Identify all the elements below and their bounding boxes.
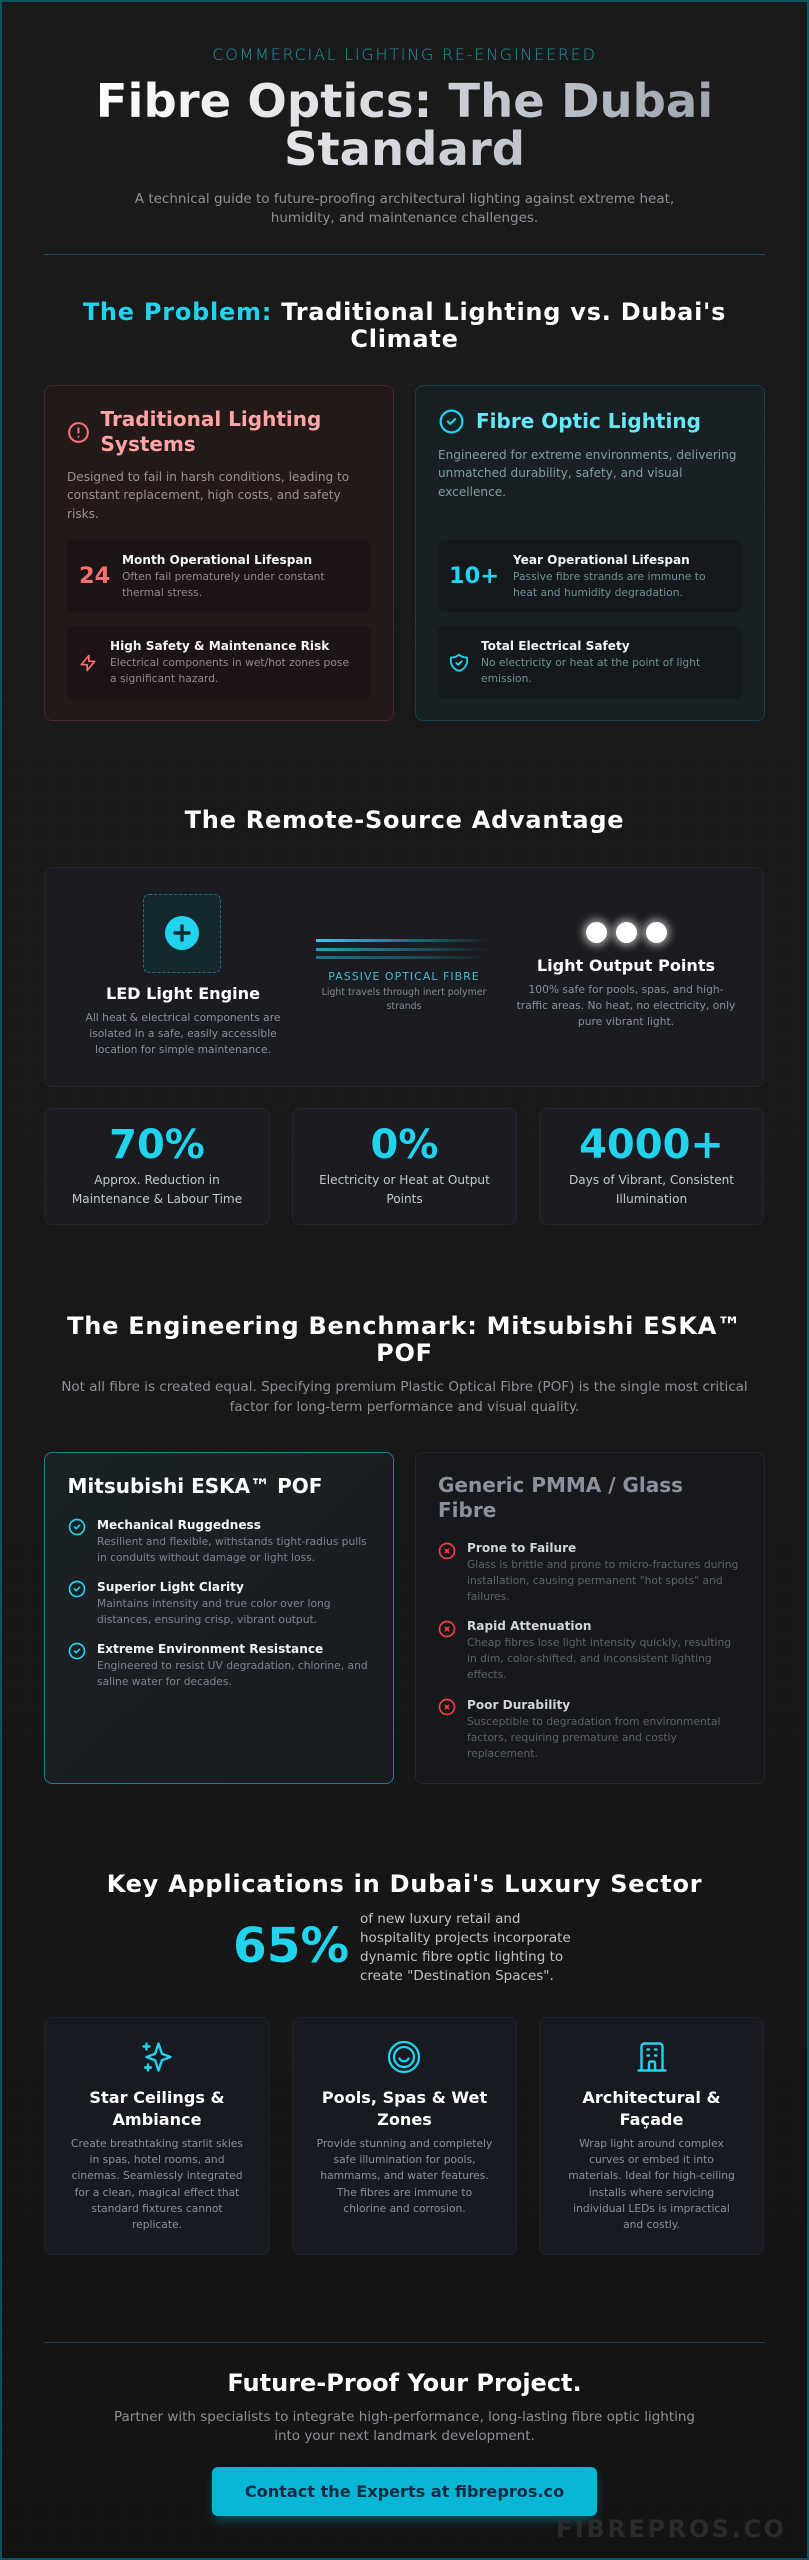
drawback description [467,1558,738,1603]
icon: pool rings [386,2039,422,2075]
drawback description: installation, causing permanent "hot spots" and [467,1574,723,1587]
card title [539,2087,764,2130]
subtitle: humidity, and maintenance challenges. [271,210,538,226]
risk description: Electrical components in wet/hot zones pose [110,656,349,669]
footer text: Partner with specialists to integrate high-performance, long-lasting fibre optic lighting [114,2408,695,2424]
drawback description: failures. [467,1590,510,1603]
card description: Provide stunning and completely [317,2137,492,2150]
card description: Wrap light around complex [579,2137,724,2150]
card description: Create breathtaking starlit skies [71,2137,243,2150]
panel: fibre optic lighting [415,385,765,721]
eyebrow label: COMMERCIAL LIGHTING RE-ENGINEERED [212,45,597,64]
fibre description: Light travels through inert polymer [322,987,486,998]
light output dots [578,914,675,951]
safety description [481,656,700,685]
drawback description [467,1714,721,1762]
stat row: 10+ year lifespan [438,540,742,612]
heading: the problem: Climate [350,325,459,353]
benchmark intro text: Not all fibre is created equal. Specifying premium Plastic Optical Fibre (POF) is the single most critical [61,1379,748,1395]
drawback title: Poor Durability [467,1698,570,1712]
drawback description [467,1636,731,1681]
icon: x circle [438,1542,456,1560]
header divider [44,254,765,255]
benefit: light clarity [68,1580,331,1626]
stat description: create "Destination Spaces". [360,1968,554,1984]
icon: warning circle [68,422,89,443]
call to action button: Contact the Experts at fibrepros.co [245,2482,564,2501]
benefit description: distances, ensuring crisp, vibrant output. [97,1613,317,1626]
card description: for a clean, magical effect that [75,2186,239,2199]
card description: chlorine and corrosion. [343,2202,466,2215]
benefit description: in conduits without damage or light loss. [97,1551,315,1564]
stat label: Illumination [616,1192,687,1206]
output description: 100% safe for pools, spas, and high- [528,983,724,996]
safety description: emission. [481,672,532,685]
stat description: dynamic fibre optic lighting to [360,1948,563,1964]
card description: individual LEDs is impractical [573,2202,730,2215]
icon: lightning bolt [80,654,96,672]
heading: the problem [83,298,726,353]
stat label: Maintenance & Labour Time [72,1192,242,1206]
stat description: heat and humidity degradation. [513,586,683,599]
icon: shield check [450,654,468,672]
stat card: 70% [44,1108,270,1225]
call to action button [212,2467,597,2516]
risk description: a significant hazard. [110,672,218,685]
icon: x circle [437,1697,457,1717]
drawback: prone to failure [438,1541,738,1603]
icon: x circle [438,1620,456,1638]
card description [539,2136,764,2233]
panel description [67,470,349,521]
stat title: Month Operational Lifespan [122,553,312,567]
title [92,76,717,172]
panel description: unmatched durability, safety, and visual [438,466,682,480]
footer heading: Future-Proof Your Project. [227,2369,582,2397]
benefit description: Maintains intensity and true color over long [97,1597,331,1610]
drawback description: Glass is brittle and prone to micro-fractures during [467,1558,738,1571]
benefit title: Mechanical Ruggedness [97,1518,261,1532]
benefit description [97,1597,331,1626]
benefit: mechanical ruggedness [68,1518,367,1564]
card title: Ambiance [112,2110,202,2128]
drawback description: Cheap fibres lose light intensity quickly, resulting [467,1636,731,1649]
title: Standard [284,122,525,176]
card description: The fibres are immune to [337,2186,472,2199]
fibre description: strands [387,1000,421,1012]
card description: installs where servicing [589,2186,714,2199]
drawback description: effects. [467,1668,507,1681]
LED engine description: All heat & electrical components are [86,1011,280,1024]
drawback description: Susceptible to degradation from environmental [467,1714,721,1728]
stat number: 10+ [449,563,499,589]
fibre strands [316,939,482,959]
heading: engineering benchmark [67,1312,742,1367]
LED engine title: LED Light Engine [106,984,260,1003]
benefit description [97,1535,367,1564]
heading: the problem: The Problem: Traditional Lighting vs. Dubai's [83,298,726,326]
panel heading: Traditional Lighting [100,407,321,431]
card title: Pools, Spas & Wet [322,2088,487,2107]
card description: in spas, hotel rooms, and [90,2153,224,2166]
panel description: Designed to fail in harsh conditions, leading to [67,470,349,484]
fibre description [322,987,486,1012]
stat description [122,570,325,599]
stat value: 0% [371,1122,438,1168]
drawback title: Rapid Attenuation [467,1619,592,1633]
panel: remote source diagram [44,867,764,1087]
LED engine description [86,1011,280,1056]
watermark: FIBREPROS.CO [556,2515,787,2543]
card description: standard fixtures cannot [91,2202,223,2215]
icon: plus disc [165,916,199,950]
stat value: 4000+ [579,1122,724,1168]
panel: traditional lighting systems [44,385,394,721]
stat row: 24 month lifespan [67,540,371,612]
risk description [110,656,349,685]
benefit title: Extreme Environment Resistance [97,1642,323,1656]
stat number: 24 [79,563,110,589]
safety title: Total Electrical Safety [481,639,630,653]
risk row: high safety risk [67,626,371,699]
panel description: constant replacement, high costs, and safety [67,488,341,502]
card description [292,2136,517,2217]
card description: curves or embed it into [589,2153,714,2166]
drawback title: Prone to Failure [467,1541,576,1555]
stat description: hospitality projects incorporate [360,1930,571,1946]
card title: Architectural & [582,2088,721,2107]
output description: traffic areas. No heat, no electricity, only [517,999,735,1012]
icon: check [68,1518,86,1536]
stat label [72,1172,242,1206]
stat description: thermal stress. [122,586,202,599]
output description: pure vibrant light. [578,1015,674,1028]
panel heading: Fibre [438,1498,496,1522]
stat label: Points [386,1192,423,1206]
stat description [360,1910,571,1986]
LED engine description: isolated in a safe, easily accessible [89,1027,277,1040]
card description: cinemas. Seamlessly integrated [72,2169,242,2182]
benefit description: Engineered to resist UV degradation, chlorine, and [97,1659,368,1672]
stat title: Year Operational Lifespan [513,553,690,567]
benefit description: Resilient and flexible, withstands tight-radius pulls [97,1535,367,1548]
stat description [513,570,706,599]
safety row [438,626,742,699]
footer text [0,2408,809,2446]
benefit title: Superior Light Clarity [97,1580,244,1594]
panel heading [438,1473,683,1522]
heading: engineering benchmark: POF [376,1339,433,1367]
benchmark intro text: factor for long-term performance and visual quality. [230,1398,579,1414]
stat card: 4000+ [539,1108,764,1225]
heading: remote source: The Remote-Source Advantage [185,806,624,834]
card: pools and spas [292,2017,517,2255]
icon: check [68,1642,86,1660]
stat description: of new luxury retail and [360,1910,520,1926]
drawback: poor durability [415,1697,765,1765]
stat label [569,1172,734,1206]
risk title: High Safety & Maintenance Risk [110,639,329,653]
LED engine description: location for simple maintenance. [95,1043,271,1056]
heading: key applications: Key Applications in Dubai's Luxury Sector [107,1870,702,1898]
output description [516,983,735,1028]
safety description: No electricity or heat at the point of light [481,656,700,669]
card title: Façade [620,2110,683,2128]
card description: safe illumination for pools, [334,2153,476,2166]
icon: sparkles [139,2039,175,2075]
drawback description: in dim, color-shifted, and inconsistent lighting [467,1652,712,1665]
card description: hammams, and water features. [320,2169,489,2182]
benchmark intro text [61,1379,748,1414]
card description [44,2136,270,2233]
panel heading: Systems [100,432,196,456]
panel heading [100,407,321,456]
panel heading: Fibre Optic Lighting [476,409,701,433]
card title [292,2087,517,2130]
card: architectural facade [539,2017,764,2255]
footer divider [44,2342,765,2343]
drawback: rapid attenuation [438,1619,731,1681]
panel description: Engineered for extreme environments, delivering [438,448,736,462]
stat label: Days of Vibrant, Consistent [569,1172,734,1186]
panel description: risks. [67,507,99,521]
stat: 65% callout [233,1908,576,1986]
card description: materials. Ideal for high-ceiling [568,2169,735,2182]
panel heading: Mitsubishi ESKA™ POF [68,1474,322,1498]
stat label [319,1172,490,1206]
drawback description: factors, requiring premature and costly [467,1731,677,1744]
icon: check [68,1580,86,1598]
card description: and costly. [623,2218,680,2231]
panel: generic PMMA glass fibre [415,1452,765,1784]
stat label: Electricity or Heat at Output [319,1172,490,1186]
drawback description: replacement. [467,1747,538,1760]
card: star ceilings [44,2017,270,2255]
icon: LED engine box [143,894,221,973]
panel description: excellence. [438,485,506,499]
card description: replicate. [132,2218,182,2231]
fibre label: PASSIVE OPTICAL FIBRE [328,970,480,983]
subtitle [134,191,674,226]
benefit: environment resistance [68,1642,368,1688]
stat description: Passive fibre strands are immune to [513,570,706,583]
output title: Light Output Points [537,956,715,975]
card title: Zones [377,2110,432,2128]
stat card: 0% [292,1108,517,1225]
stat value: 65% [233,1918,349,1974]
subtitle: A technical guide to future-proofing architectural lighting against extreme heat, [135,191,674,207]
card title [44,2087,270,2130]
panel: Mitsubishi ESKA POF [44,1452,394,1784]
footer text: into your next landmark development. [274,2428,535,2444]
stat value: 70% [109,1122,205,1168]
stat label: Approx. Reduction in [94,1172,220,1186]
benefit description [97,1659,368,1688]
card title: Star Ceilings & [89,2088,225,2107]
heading: engineering benchmark: The Engineering Benchmark: Mitsubishi ESKA™ [67,1312,742,1340]
title: Fibre Optics: The Dubai [96,74,713,128]
icon: building [634,2039,670,2075]
icon: check circle [440,410,464,434]
stat description: Often fail prematurely under constant [122,570,325,583]
panel heading: Generic PMMA / Glass [438,1473,683,1497]
benefit description: saline water for decades. [97,1675,232,1688]
panel description [438,448,736,499]
